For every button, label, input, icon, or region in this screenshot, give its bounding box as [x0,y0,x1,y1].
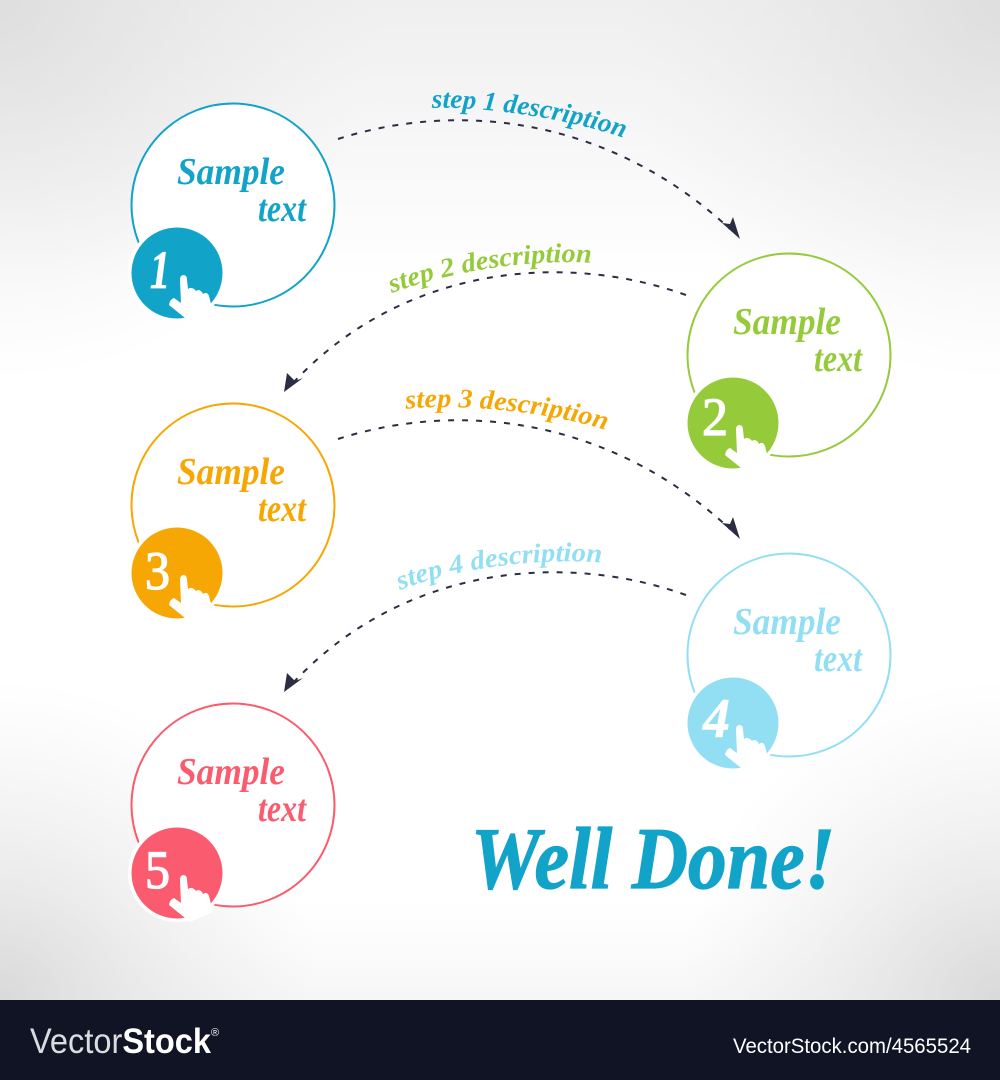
arrow: step 3 to 4 [338,420,740,539]
icon: hand pointer [169,275,213,322]
badge 3 [128,524,226,622]
label: step 2 description: step 2 description [390,243,590,293]
footer url: VectorStock.com/4565524 [733,1035,971,1058]
badge 3: 3 [145,541,170,601]
icon: hand pointer [169,575,213,622]
footer logo: VectorStock [30,1022,211,1061]
footer bar [0,1000,1000,1080]
panel: step 2 [684,254,890,472]
panel: step 5 [128,704,334,922]
label: step 3 description: step 3 description [406,390,608,430]
sample text 3: Sample [177,451,285,493]
registered mark: ® [211,1027,219,1039]
badge 4 [684,674,782,772]
ring 2 [688,254,890,456]
panel: step 4 [684,554,890,772]
ring 3 [132,404,334,606]
badge 5: 5 [145,840,170,900]
icon: hand pointer [725,425,769,472]
sample text 3: text [258,488,307,530]
ring 5 [132,704,334,906]
sample text 5: Sample [177,751,285,793]
badge 1 [128,224,226,322]
ring 1 [132,104,334,306]
sample text 5: text [258,788,307,830]
icon: hand pointer [169,875,213,922]
sample text 1: Sample [177,151,285,193]
arrow: step 2 to 3 [284,272,686,392]
sample text 4: text [814,638,863,680]
ring 4 [688,554,890,756]
panel: step 1 [128,104,334,322]
badge 2 [684,374,782,472]
badge 1: 1 [150,240,170,300]
label: step 4 description: step 4 description [398,542,601,590]
label: step 1 description: step 1 description [432,92,626,138]
badge 4: 4 [702,688,730,750]
icon: hand pointer [725,725,769,772]
arrow: step 4 to 5 [284,572,686,692]
sample text 2: text [814,338,863,380]
panel: step 3 [128,404,334,622]
sample text 2: Sample [733,301,841,343]
heading: Well Done: Well Done! [471,811,835,908]
sample text 1: text [258,188,307,230]
arrow: step 1 to 2 [338,120,740,239]
badge 5 [128,824,226,922]
badge 2: 2 [702,387,728,447]
sample text 4: Sample [733,601,841,643]
